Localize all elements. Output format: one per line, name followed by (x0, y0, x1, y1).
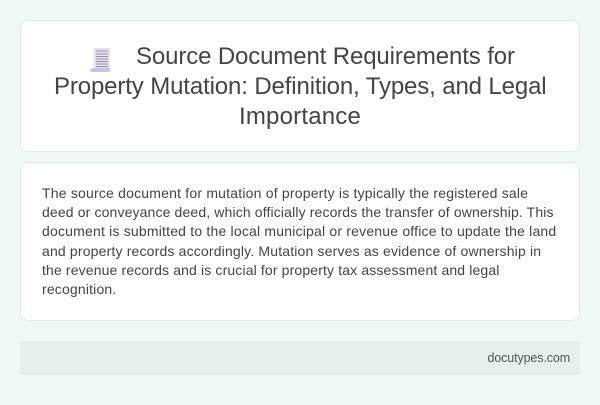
title: Source Document Requirements for (136, 43, 515, 70)
text block: description (42, 185, 556, 297)
text block: description: deed or conveyance deed, which officially records the transfer of ownership. This (42, 204, 554, 220)
panel: footer bar (20, 341, 580, 375)
title (54, 43, 547, 130)
text block: description: the revenue records and is crucial for property tax assessment and legal (42, 262, 500, 278)
panel: description card (20, 162, 580, 321)
text block: description: and property records accordingly. Mutation serves as evidence of ownership in (42, 243, 541, 259)
text block: description: recognition. (42, 281, 116, 297)
title: Importance (239, 103, 361, 130)
text block: description: The source document for mutation of property is typically the registered sale (42, 185, 528, 201)
title: Property Mutation: Definition, Types, and Legal (54, 73, 547, 100)
footer text: docutypes.com (487, 351, 570, 365)
panel: title card (20, 20, 580, 152)
icon: document scroll (90, 48, 110, 72)
text block: description: document is submitted to the local municipal or revenue office to update the land (42, 223, 556, 239)
